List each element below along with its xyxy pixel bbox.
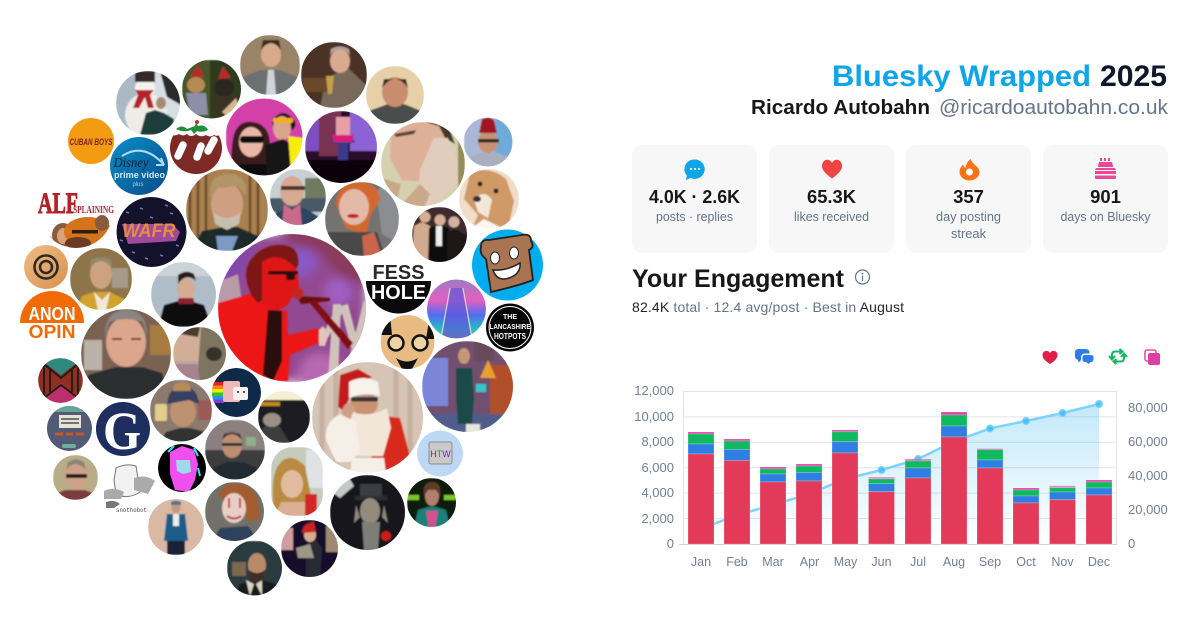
avatar: red and teal square pattern: [38, 358, 83, 403]
user name and handle: [751, 97, 1169, 119]
avatar: bespectacled man illustration: [380, 315, 434, 369]
avatar: bearded man in dim room: [227, 541, 283, 596]
avatar: copper coin logo: [24, 245, 68, 289]
avatar: WAFR logo: [116, 197, 186, 267]
x axis month labels: Dec: [1088, 555, 1110, 569]
avatar: Fess Hole logo: HOLE: [371, 282, 426, 304]
avatar: singer in red light, main profile: [218, 234, 366, 382]
avatar: smiling man with glasses: [53, 455, 98, 500]
icon: reposts: [1109, 349, 1127, 364]
icon: info: [856, 270, 870, 284]
avatar: two dogs in santa hats: [182, 60, 242, 119]
avatar: Lancashire Hotpots logo: HOTPOTS: [494, 332, 527, 341]
bar: Oct: [1013, 488, 1039, 544]
x axis month labels: Oct: [1016, 555, 1036, 569]
avatar: Fess Hole logo: FESS: [372, 262, 424, 284]
avatar: games illustration: [47, 406, 92, 451]
icon: likes: [1042, 351, 1058, 364]
panel: days on Bluesky: 901: [1090, 186, 1121, 207]
x axis month labels: [691, 555, 1110, 569]
left y axis labels: 4,000: [641, 485, 674, 500]
avatar: Christmas pudding logo: [170, 120, 222, 175]
bar: Feb: [724, 439, 750, 544]
avatar: man in yellow blazer: [70, 248, 132, 310]
avatar: man with snowman: [116, 71, 181, 137]
panel: day posting streak: day posting: [936, 209, 1001, 224]
x axis month labels: Jun: [871, 555, 892, 569]
avatar: Disney prime video plus: Disney: [113, 156, 149, 171]
avatar: guitarist in santa hat: [281, 520, 340, 578]
x axis month labels: Jan: [691, 555, 711, 569]
avatar: performer on purple stage: [305, 111, 378, 184]
avatar: Lancashire Hotpots logo: LANCASHIRE: [490, 324, 531, 331]
bar: Dec: [1086, 480, 1112, 544]
cumulative line points: [878, 400, 1102, 474]
panel: posts and replies: [632, 145, 757, 253]
right y axis labels: 20,000: [1128, 502, 1168, 517]
avatar: man on cream wall: [366, 66, 424, 124]
avatar: woman with curly dog: [173, 327, 227, 381]
avatar: man in woolly hat: [150, 380, 212, 442]
avatar: HTW logo: HTW: [430, 449, 451, 459]
avatar: Disney prime video plus: prime video: [114, 170, 165, 181]
icon: flame: [960, 159, 980, 180]
avatar: man by bus sign: [258, 391, 310, 443]
panel: day posting streak: [906, 145, 1031, 253]
avatar: old man in top hat: [330, 475, 406, 551]
avatar: Anon Opin logo: ANON: [28, 304, 76, 324]
avatar: rainbow staircase: [427, 280, 486, 338]
right y axis labels: 0: [1128, 536, 1135, 551]
panel: days on Bluesky: days on Bluesky: [1060, 209, 1151, 224]
left y axis labels: [634, 383, 674, 551]
avatar: bearded man by slats: [186, 169, 268, 251]
bar: Aug: [941, 412, 967, 544]
avatar: couple in sunglasses on pink: [226, 98, 304, 176]
avatar: man in red fez: [464, 118, 513, 167]
x axis month labels: Mar: [762, 555, 784, 569]
x axis month labels: Nov: [1051, 555, 1074, 569]
avatar: Anon Opin logo: [20, 291, 84, 342]
chart: monthly stacked engagement with cumulative line: [634, 383, 1168, 569]
avatar: man in grey suit: [240, 35, 300, 95]
grid lines and axes: [683, 391, 1117, 544]
avatar: Cuban Boys logo: CUBAN BOYS: [70, 137, 112, 147]
avatar: HTW logo: [417, 430, 463, 476]
avatar: Alfsplaining logo: SPLAINING: [73, 205, 114, 216]
avatar: bald man in glasses: [270, 169, 326, 226]
avatar: red haired woman: [325, 182, 400, 256]
avatar: snotbot sketch: snothobot: [116, 507, 147, 514]
stacked bars: [688, 412, 1112, 544]
avatar: Santa Claus: [312, 362, 424, 474]
right y axis labels: [1128, 400, 1168, 551]
right y axis labels: 80,000: [1128, 400, 1168, 415]
icon: quotes: [1145, 350, 1160, 365]
left y axis labels: 12,000: [634, 383, 674, 398]
bar: Sep: [977, 449, 1003, 544]
panel: day posting streak: streak: [951, 226, 986, 241]
bar: Mar: [760, 467, 786, 544]
x axis month labels: Apr: [800, 555, 819, 569]
panel: days on Bluesky: [1043, 145, 1168, 253]
avatar: Alfsplaining logo: ALF: [38, 187, 78, 220]
avatar: cartoon toast: [472, 230, 543, 300]
avatar: Anon Opin logo: OPIN: [28, 322, 76, 342]
avatar: man holding trophy: [301, 42, 367, 108]
panel: avatar bubble cluster: [20, 35, 543, 596]
avatar: man in black coat and scarf: [151, 262, 217, 328]
avatar: blonde woman with red drink: [271, 447, 323, 516]
avatar: Lancashire Hotpots logo: THE: [503, 314, 517, 321]
bar: Nov: [1050, 486, 1076, 544]
avatar: pink and cyan pixel beard: [158, 444, 206, 492]
avatar: golden retriever: [459, 169, 519, 229]
x axis month labels: Feb: [726, 555, 748, 569]
panel: posts and replies: 4.0K · 2.6K: [649, 186, 741, 207]
avatar: Cuban Boys logo: [68, 118, 114, 164]
bar: May: [832, 430, 858, 544]
avatar: smiling man in dark jumper: [81, 309, 172, 399]
bar: Jul: [905, 459, 931, 544]
x axis month labels: Aug: [943, 555, 965, 569]
avatar: Guardian G logo: G: [103, 401, 141, 461]
left y axis labels: 8,000: [641, 434, 674, 449]
avatar: man in blue jacket, full length: [148, 499, 204, 555]
avatar: Nyan cat: [212, 368, 261, 417]
cumulative area: [701, 404, 1099, 544]
bar: Jun: [868, 477, 894, 544]
icon: birthday cake: [1095, 158, 1116, 179]
x axis month labels: Sep: [979, 555, 1001, 569]
user name and handle: @ricardoautobahn.co.uk: [939, 97, 1169, 119]
avatar: snotbot sketch: [104, 465, 155, 514]
left y axis labels: 10,000: [634, 409, 674, 424]
panel: posts and replies: posts · replies: [656, 209, 733, 224]
title: 2025: [1100, 60, 1167, 93]
bar: Apr: [796, 464, 822, 544]
avatar: WAFR logo: WAFR: [122, 221, 176, 242]
left y axis labels: 6,000: [641, 460, 674, 475]
avatar: Disney prime video plus: [110, 137, 168, 195]
title: Bluesky Wrapped: [832, 60, 1091, 93]
x axis month labels: May: [834, 555, 858, 569]
avatar: Disney prime video plus: plus: [132, 182, 144, 188]
panel: likes received: 65.3K: [807, 186, 857, 207]
x axis month labels: Jul: [910, 555, 926, 569]
right y axis labels: 60,000: [1128, 434, 1168, 449]
panel: likes received: [769, 145, 894, 253]
avatar: Alfsplaining logo: [38, 193, 114, 248]
avatar: man with glasses in office: [205, 420, 265, 480]
icon: heart: [822, 160, 842, 178]
heading: your engagement: Your Engagement: [632, 265, 845, 293]
user name and handle: Ricardo Autobahn: [751, 97, 930, 119]
panel: day posting streak: 357: [953, 186, 984, 207]
left y axis labels: 0: [667, 536, 674, 551]
avatar: man in suit by a lamp: [422, 341, 514, 434]
engagement summary line: 82.4K total · 12.4 avg/post · Best in August: [632, 299, 904, 315]
icon: chat bubble: [684, 159, 705, 180]
bar: Jan: [688, 432, 714, 544]
icon: replies: [1075, 349, 1094, 364]
avatar: woman in clown make-up: [205, 482, 265, 542]
cumulative line: [701, 404, 1099, 529]
avatar: Lancashire Hotpots logo: [486, 304, 534, 352]
avatar: three people in formal wear: [412, 207, 468, 263]
avatar: man with thumb to face: [381, 122, 465, 208]
panel: likes received: likes received: [794, 209, 869, 224]
avatar: Fess Hole logo: [366, 262, 431, 314]
right y axis labels: 40,000: [1128, 468, 1168, 483]
avatar: game character: [407, 478, 457, 528]
chart legend icons: [1042, 349, 1160, 365]
left y axis labels: 2,000: [641, 511, 674, 526]
